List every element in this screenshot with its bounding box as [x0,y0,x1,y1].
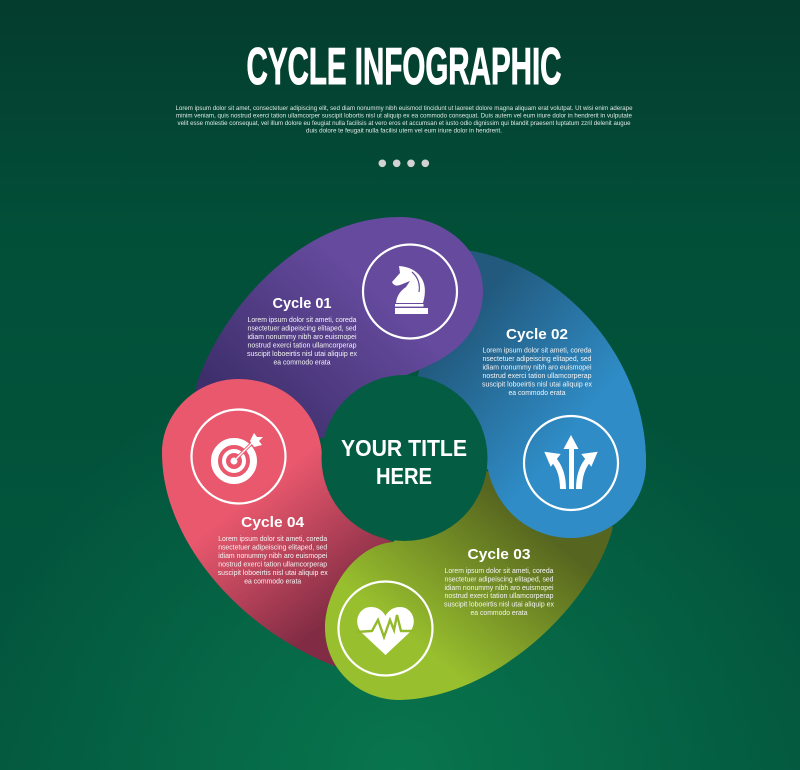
cycle 03 text: ea commodo erata [470,610,528,617]
cycle 02 text: ea commodo erata [508,390,566,397]
cycle 04 text: suscipit loboeirtis nisl utai aliquip ex [218,570,328,577]
cycle 03 text: Lorem ipsum dolor sit ameti, coreda [444,568,554,575]
segment: blue head [486,430,646,538]
cycle 04 text [218,514,328,586]
icon: heart with pulse [338,582,432,676]
title: CYCLE INFOGRAPHIC [246,38,562,96]
icon: target with arrow [192,410,286,504]
intro text block: minim veniam, quis nostrud exerci tation ullamcorper suscipit lobortis nisl ut aliquip ex ea commodo consequat. Duis autem vel eum iriure dolor in hendrerit in vulputate [176,114,633,120]
cycle 01 text: Cycle 01 [272,295,332,312]
pagination dots [378,160,429,167]
icon: chess knight [363,244,457,338]
cycle 01 text: nsectetuer adipeiscing elitaped, sed [248,326,357,332]
cycle 01 text: Lorem ipsum dolor sit ameti, coreda [248,317,357,324]
segment: red [162,379,400,667]
cycle 03 text: Cycle 03 [468,546,530,563]
cycle 04 text: nostrud exerci tation ullamcorperap [218,562,327,568]
cycle 02 text: Cycle 02 [506,326,568,343]
cycle 02 text: suscipit loboeirtis nisl utai aliquip ex [482,382,592,388]
cycle 03 text: nsectetuer adipeiscing elitaped, sed [444,576,554,584]
cycle 03 text [444,546,554,617]
center circle [322,375,488,541]
cycle 04 text: ea commodo erata [244,578,301,586]
cycle 02 text [482,326,592,397]
cycle 03 text: idiam nonummy nibh aro euismopei [444,585,554,592]
cycle 02 text: nostrud exerci tation ullamcorperap [482,373,592,380]
cycle 01 text [247,295,357,366]
cycle 04 text: nsectetuer adipeiscing elitaped, sed [218,544,327,552]
center title [341,435,467,489]
cycle 01 text: suscipit loboeirtis nisl utai aliquip ex [247,351,357,358]
intro text block: duis dolore te feugait nulla facilisi utem vel eum iriure dolor in hendrerit. [306,128,502,134]
cycle 04 text: idiam nonummy nibh aro euismopei [218,553,328,560]
cycle 01 text: nostrud exerci tation ullamcorperap [248,342,357,350]
segment: blue tail [415,250,646,538]
icon: three-way arrows [524,416,618,510]
intro text block: velit esse molestie consequat, vel illum dolore eu feugiat nulla facilisis at vero eros et accumsan et iusto odio dignissim qui blandit praesent luptatum zzril delenit augue [178,121,631,127]
cycle 01 text: ea commodo erata [274,360,331,366]
center title: YOUR TITLE [341,435,467,461]
segment: purple [194,217,483,440]
cycle 01 text: idiam nonummy nibh aro euismopei [248,334,357,341]
intro text block: Lorem ipsum dolor sit amet, consectetuer adipiscing elit, sed diam nonummy nibh euismod tincidunt ut laoreet dolore magna aliquam erat volutpat. Ut wisi enim aderape [176,106,633,112]
segment: green [325,465,613,700]
cycle 04 text: Lorem ipsum dolor sit ameti, coreda [218,536,327,543]
cycle 03 text: nostrud exerci tation ullamcorperap [444,593,554,600]
cycle 02 text: idiam nonummy nibh aro euismopei [482,364,592,372]
cycle 03 text: suscipit loboeirtis nisl utai aliquip ex [444,602,554,608]
intro text block [176,106,633,134]
cycle 02 text: Lorem ipsum dolor sit ameti, coreda [482,348,592,354]
cycle 02 text: nsectetuer adipeiscing elitaped, sed [482,356,592,363]
cycle 04 text: Cycle 04 [241,514,305,531]
center title: HERE [376,463,432,489]
